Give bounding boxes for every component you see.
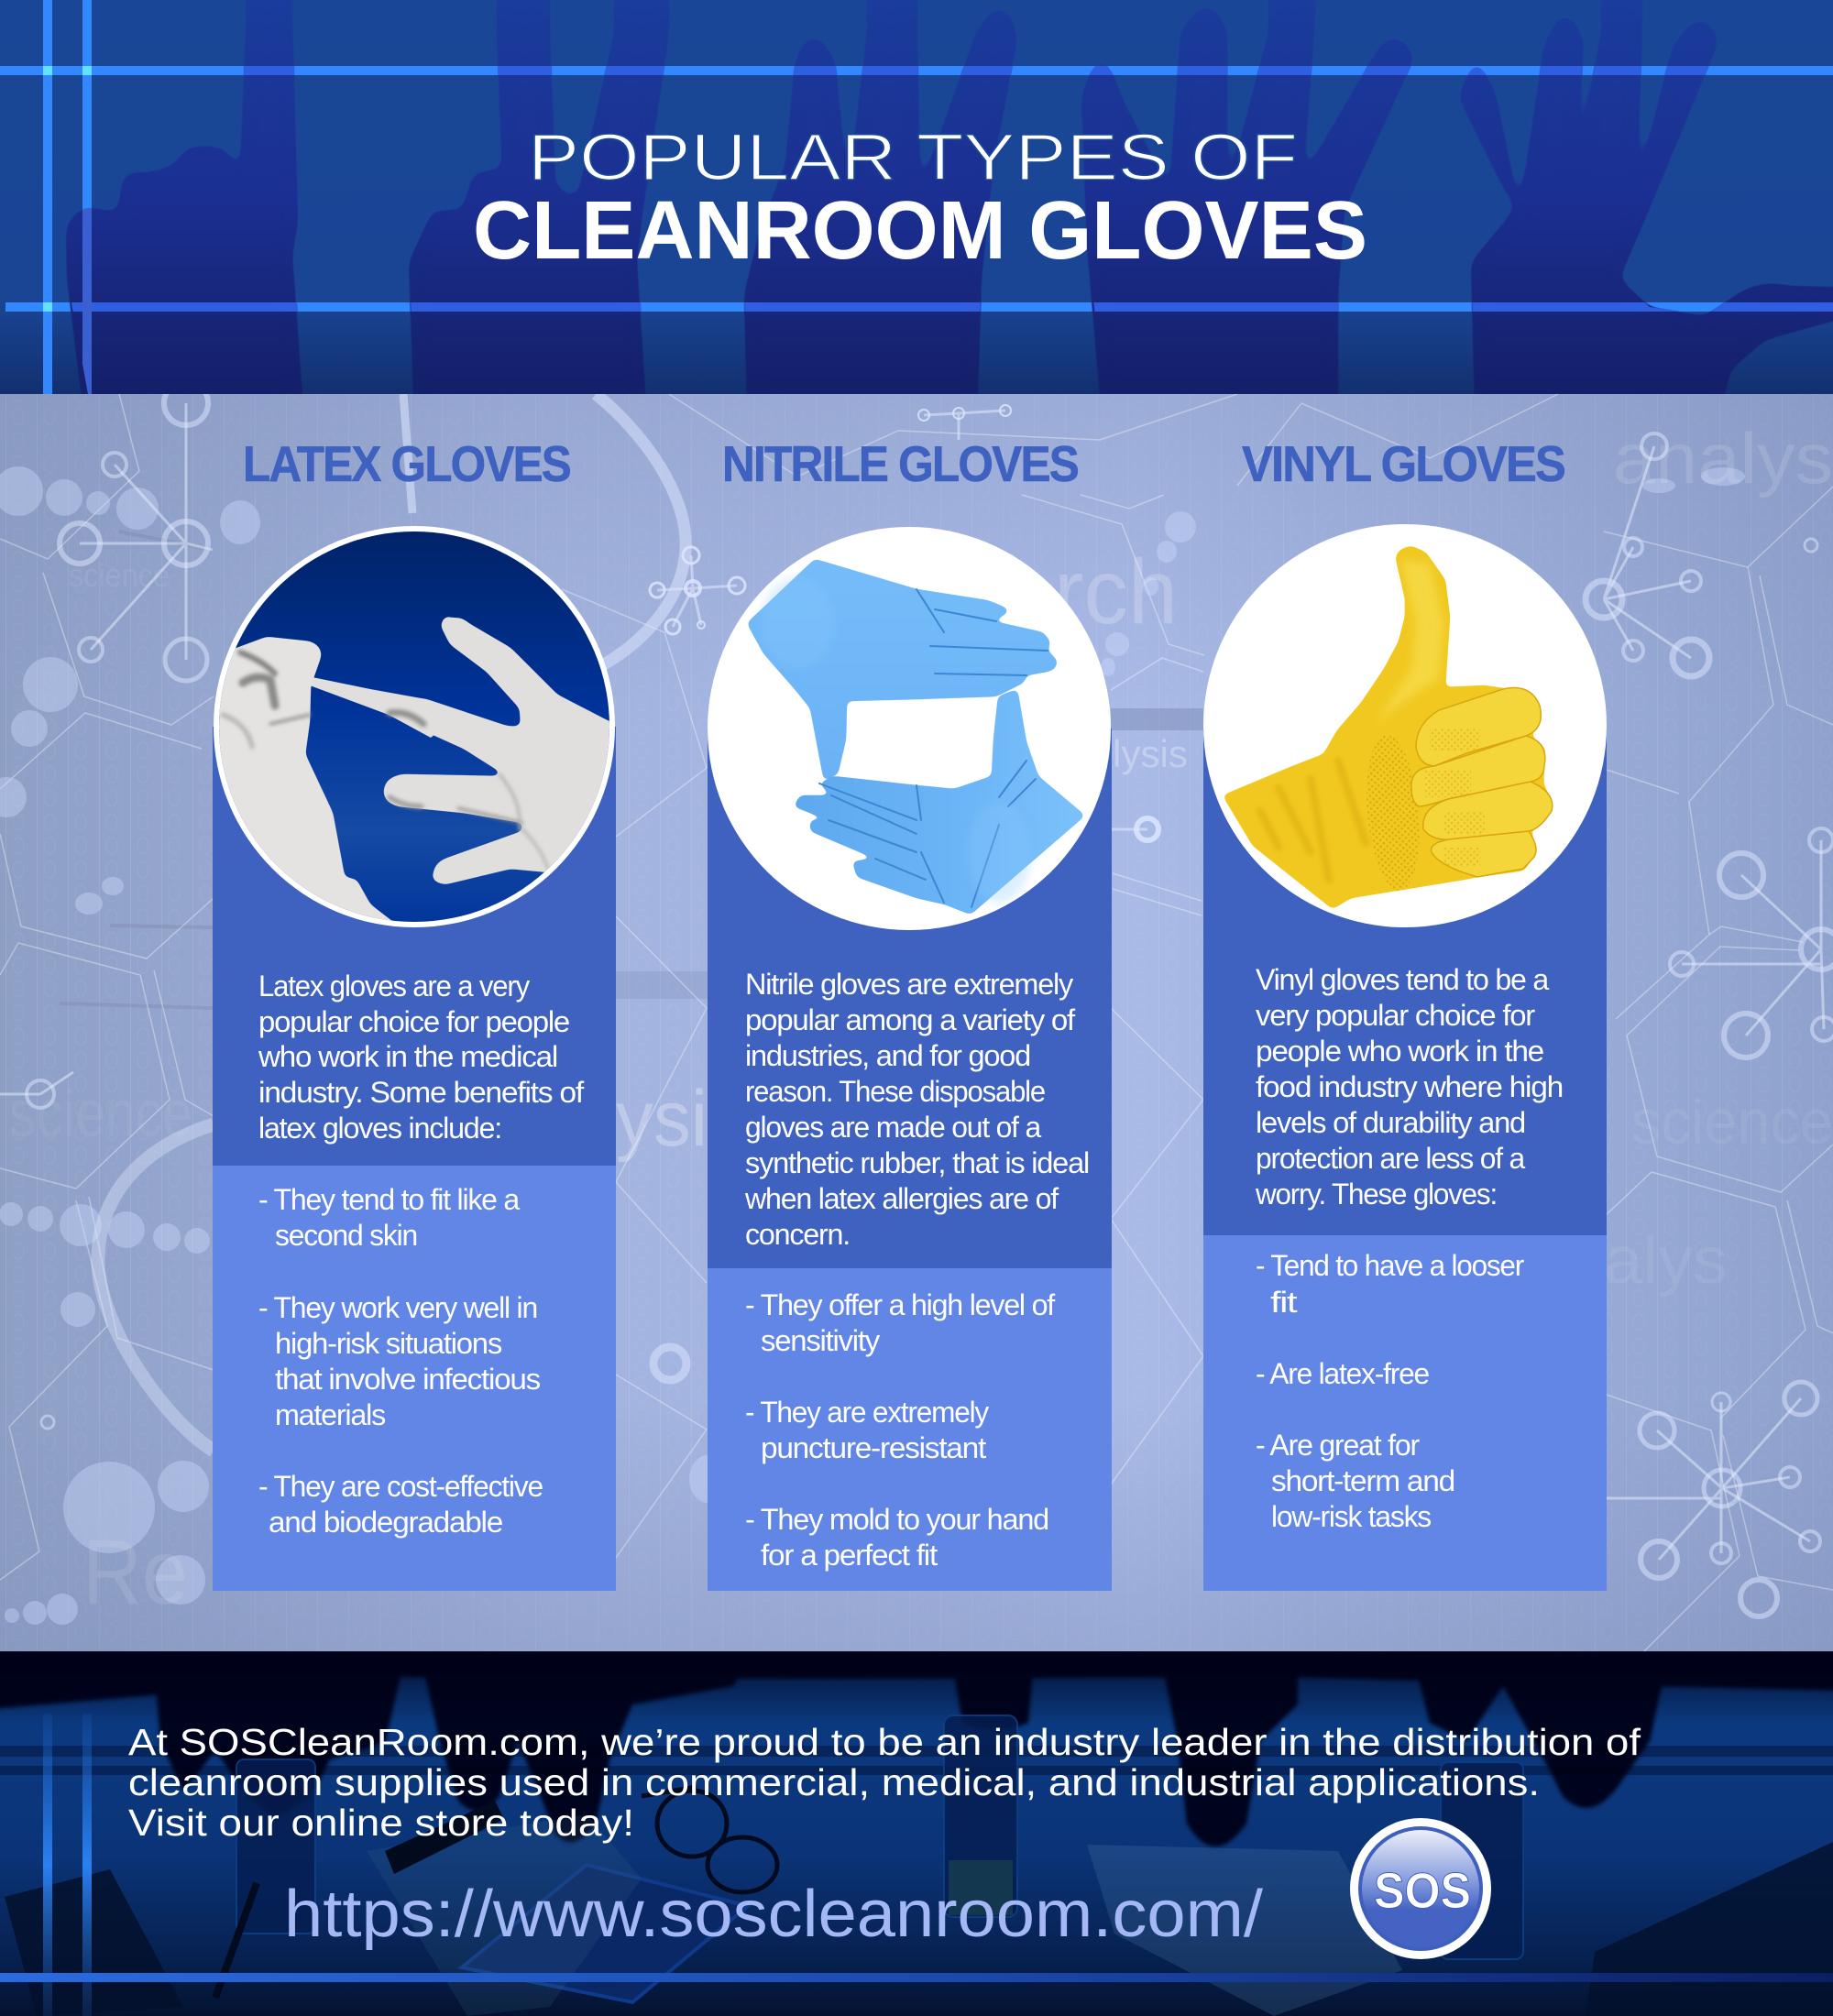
panel: nitrile gloves — [708, 527, 1112, 1591]
intro text: nitrile: synthetic rubber, that is ideal — [745, 1146, 1089, 1179]
benefit list: latex: and biodegradable — [269, 1506, 502, 1539]
title: CLEANROOM GLOVES — [473, 185, 1367, 277]
benefit list: latex: - They work very well in — [258, 1291, 537, 1324]
intro text: latex: latex gloves include: — [258, 1112, 501, 1145]
intro text: vinyl: people who work in the — [1256, 1035, 1543, 1068]
heading: nitrile gloves: NITRILE GLOVES — [722, 435, 1078, 492]
benefit list: latex: high-risk situations — [275, 1327, 501, 1360]
benefit list: nitrile: sensitivity — [761, 1324, 880, 1357]
icon: SOS logo — [1350, 1818, 1491, 1959]
intro text: vinyl: food industry where high — [1256, 1070, 1563, 1103]
panel: molecular network background — [0, 381, 1833, 1652]
intro text: latex: who work in the medical — [258, 1040, 557, 1073]
intro text: vinyl: worry. These gloves: — [1255, 1178, 1497, 1211]
intro text: latex: Latex gloves are a very — [258, 970, 530, 1003]
benefit list: nitrile: - They offer a high level of — [745, 1288, 1055, 1321]
photo: blue nitrile gloves framing — [708, 527, 1111, 930]
panel: molecular network background: alys — [1604, 1224, 1728, 1298]
panel: molecular network background: science — [9, 1078, 192, 1151]
heading: vinyl gloves: VINYL GLOVES — [1242, 435, 1564, 492]
intro text: nitrile: industries, and for good — [745, 1039, 1030, 1072]
panel: header background with gloved hands — [0, 0, 1833, 394]
closing message: cleanroom supplies used in commercial, medical, and industrial applications. — [128, 1761, 1540, 1803]
benefit list: vinyl: low-risk tasks — [1271, 1500, 1431, 1533]
intro text: latex: popular choice for people — [258, 1005, 569, 1038]
benefit list: vinyl: fit — [1270, 1286, 1298, 1319]
panel: molecular network background: lysis — [1113, 732, 1188, 775]
website url: https://www.soscleanroom.com/ — [284, 1878, 1263, 1951]
intro text: nitrile: gloves are made out of a — [745, 1111, 1041, 1144]
benefit list: nitrile: - They are extremely — [745, 1396, 989, 1429]
closing message: At SOSCleanRoom.com, we’re proud to be an industry leader in the distribution of — [128, 1721, 1641, 1763]
intro text: nitrile — [744, 968, 1089, 1251]
benefit list: nitrile — [745, 1288, 1055, 1572]
benefit list: nitrile: - They mold to your hand — [745, 1503, 1048, 1536]
panel: footer lab desk background — [0, 1640, 1833, 2016]
benefit list: latex: second skin — [275, 1219, 417, 1252]
intro text: vinyl: protection are less of a — [1256, 1142, 1525, 1175]
photo: yellow vinyl glove thumbs-up — [1203, 524, 1607, 927]
photo: stretched white latex glove — [214, 526, 615, 927]
intro text: vinyl: very popular choice for — [1256, 999, 1536, 1032]
benefit list: vinyl: - Are latex-free — [1256, 1357, 1429, 1390]
intro text: nitrile: concern. — [745, 1218, 850, 1251]
intro text: latex: industry. Some benefits of — [258, 1076, 584, 1109]
heading: latex gloves: LATEX GLOVES — [243, 435, 570, 492]
icon: SOS logo: SOS — [1374, 1862, 1471, 1919]
benefit list: vinyl: - Are great for — [1256, 1429, 1421, 1462]
benefit list: latex: that involve infectious — [275, 1363, 540, 1396]
benefit list: vinyl: - Tend to have a looser — [1256, 1249, 1525, 1282]
benefit list: vinyl — [1256, 1249, 1525, 1533]
panel: molecular network background: science — [69, 556, 170, 594]
intro text: latex — [258, 970, 584, 1145]
panel: molecular network background: rch — [1054, 541, 1178, 643]
title — [473, 122, 1367, 277]
closing message — [128, 1721, 1641, 1844]
intro text: nitrile: reason. These disposable — [745, 1075, 1045, 1108]
intro text: nitrile: when latex allergies are of — [744, 1182, 1059, 1215]
benefit list: latex: materials — [275, 1398, 385, 1431]
panel: vinyl gloves — [1203, 524, 1607, 1591]
benefit list: latex — [258, 1183, 543, 1539]
benefit list: nitrile: for a perfect fit — [761, 1539, 938, 1572]
benefit list: vinyl: short-term and — [1271, 1464, 1454, 1497]
intro text: vinyl: levels of durability and — [1256, 1106, 1525, 1139]
closing message: Visit our online store today! — [128, 1802, 634, 1844]
intro text: nitrile: popular among a variety of — [745, 1003, 1075, 1036]
intro text: vinyl — [1255, 963, 1563, 1211]
panel: latex gloves — [213, 526, 616, 1591]
intro text: nitrile: Nitrile gloves are extremely — [745, 968, 1073, 1001]
panel: molecular network background: analys — [1613, 418, 1833, 499]
panel: molecular network background: ysi — [616, 1075, 708, 1163]
benefit list: latex: - They are cost-effective — [258, 1470, 543, 1503]
panel: molecular network background: Re — [82, 1521, 188, 1624]
benefit list: latex: - They tend to fit like a — [258, 1183, 520, 1216]
title: POPULAR TYPES OF — [528, 122, 1298, 194]
benefit list: nitrile: puncture-resistant — [761, 1431, 986, 1464]
intro text: vinyl: Vinyl gloves tend to be a — [1256, 963, 1549, 996]
